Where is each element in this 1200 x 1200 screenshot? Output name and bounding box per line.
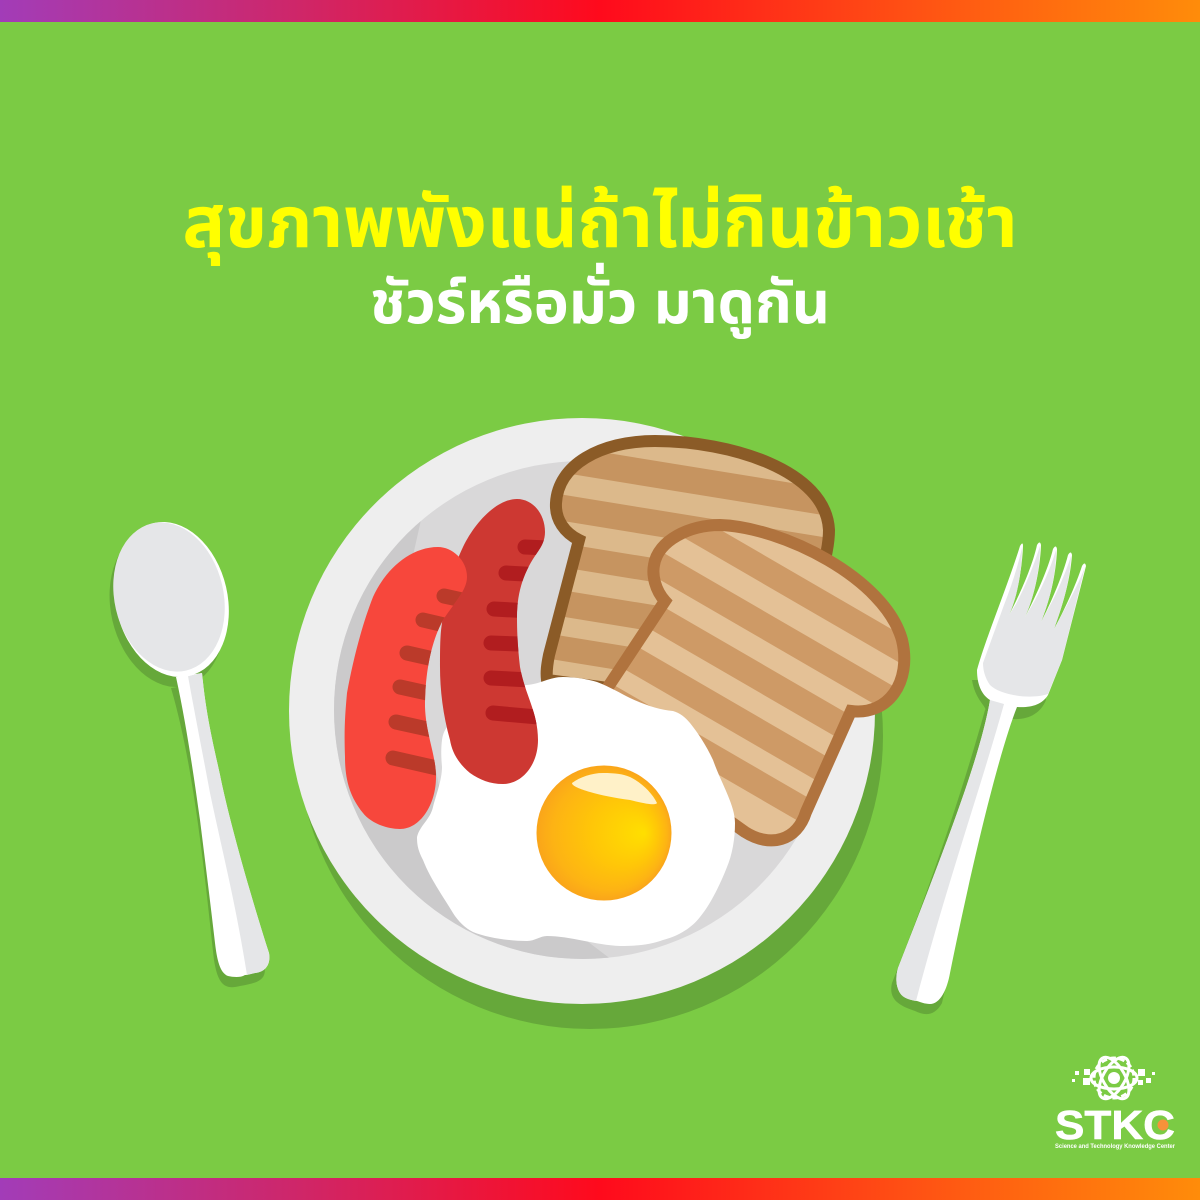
logo wordmark: STKC [1055, 1102, 1175, 1148]
logo orange dot [1158, 1120, 1168, 1130]
spoon handle [176, 673, 269, 977]
plate [289, 418, 883, 1029]
STKC logo [1055, 1053, 1175, 1150]
plate rim [289, 418, 875, 1004]
egg yolk [536, 766, 672, 900]
sausage body [345, 547, 467, 829]
plate well [334, 461, 832, 959]
back toast crust [547, 441, 829, 700]
yolk highlight [572, 773, 657, 804]
light red sausage [344, 547, 467, 829]
fried egg [417, 677, 735, 946]
logo pixel squares [1072, 1069, 1155, 1085]
front toast [602, 519, 910, 846]
spoon bowl [99, 511, 239, 683]
dark red sausage [440, 499, 545, 784]
top gradient bar [0, 0, 1200, 22]
subheading: ชัวร์หรือมั่ว มาดูกัน [370, 262, 830, 339]
fork [891, 542, 1086, 1014]
logo tagline: Science and Technology Knowledge Center [1055, 1143, 1175, 1150]
back toast stripes [552, 447, 823, 682]
bottom gradient bar [0, 1178, 1200, 1200]
front toast crust [606, 525, 904, 840]
fork shadow [891, 680, 1046, 1014]
spoon [94, 510, 269, 987]
heading: สุขภาพพังแน่ถ้าไม่กินข้าวเช้า [182, 183, 1018, 266]
sausage grill marks [386, 588, 462, 776]
front toast stripes [614, 531, 898, 834]
spoon handle shade [188, 673, 269, 975]
plate well shade [334, 522, 608, 959]
plate shadow [297, 443, 883, 1029]
back toast [540, 435, 835, 684]
fork silhouette [896, 542, 1086, 1004]
sausage body [440, 499, 545, 784]
egg white [417, 677, 735, 946]
spoon bowl rim [99, 510, 244, 689]
fork head shade [983, 546, 1085, 697]
fork handle shade [896, 700, 1004, 1001]
logo atom mark [1091, 1053, 1137, 1103]
spoon shadow [94, 517, 265, 987]
sausage grill marks [484, 540, 544, 724]
